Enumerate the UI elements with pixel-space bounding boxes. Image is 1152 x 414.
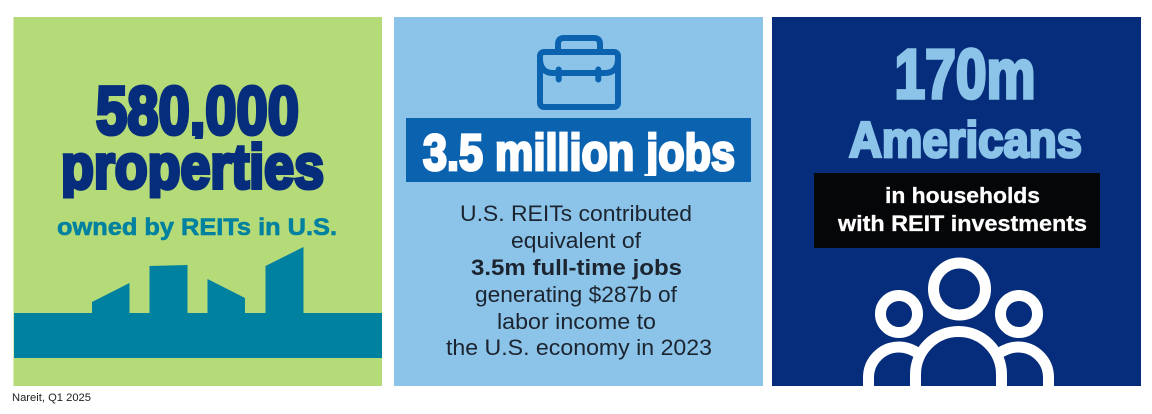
- callout: in households: with REIT investments: [837, 211, 1087, 236]
- panel: properties: [14, 17, 382, 386]
- heading: properties: properties: [61, 133, 324, 202]
- heading: 580,000: 580,000: [96, 73, 299, 149]
- text block: jobs description: U.S. REITs contributed: [460, 201, 692, 226]
- panel: Americans: [772, 17, 1141, 386]
- panel: jobs: [394, 17, 763, 386]
- callout: in households: [814, 173, 1100, 248]
- callout: in households: in households: [885, 183, 1040, 208]
- icon: briefcase: [540, 38, 618, 107]
- icon: people: [868, 263, 1048, 386]
- text block: jobs description: 3.5m full-time jobs: [471, 255, 682, 280]
- heading: Americans: Americans: [849, 112, 1082, 168]
- text block: jobs description: generating $287b of: [475, 282, 678, 307]
- source note: Nareit, Q1 2025: [12, 392, 91, 404]
- text block: jobs description: equivalent of: [511, 228, 642, 253]
- text block: jobs description: the U.S. economy in 2023: [446, 335, 712, 360]
- icon: city skyline: [14, 247, 382, 358]
- banner: 3.5 million jobs: 3.5 million jobs: [423, 124, 735, 181]
- text block: jobs description: labor income to: [497, 309, 656, 334]
- heading: 170m: 170m: [894, 35, 1036, 113]
- text block: jobs description: [446, 201, 712, 360]
- subheading: owned by REITs: owned by REITs in U.S.: [57, 214, 337, 241]
